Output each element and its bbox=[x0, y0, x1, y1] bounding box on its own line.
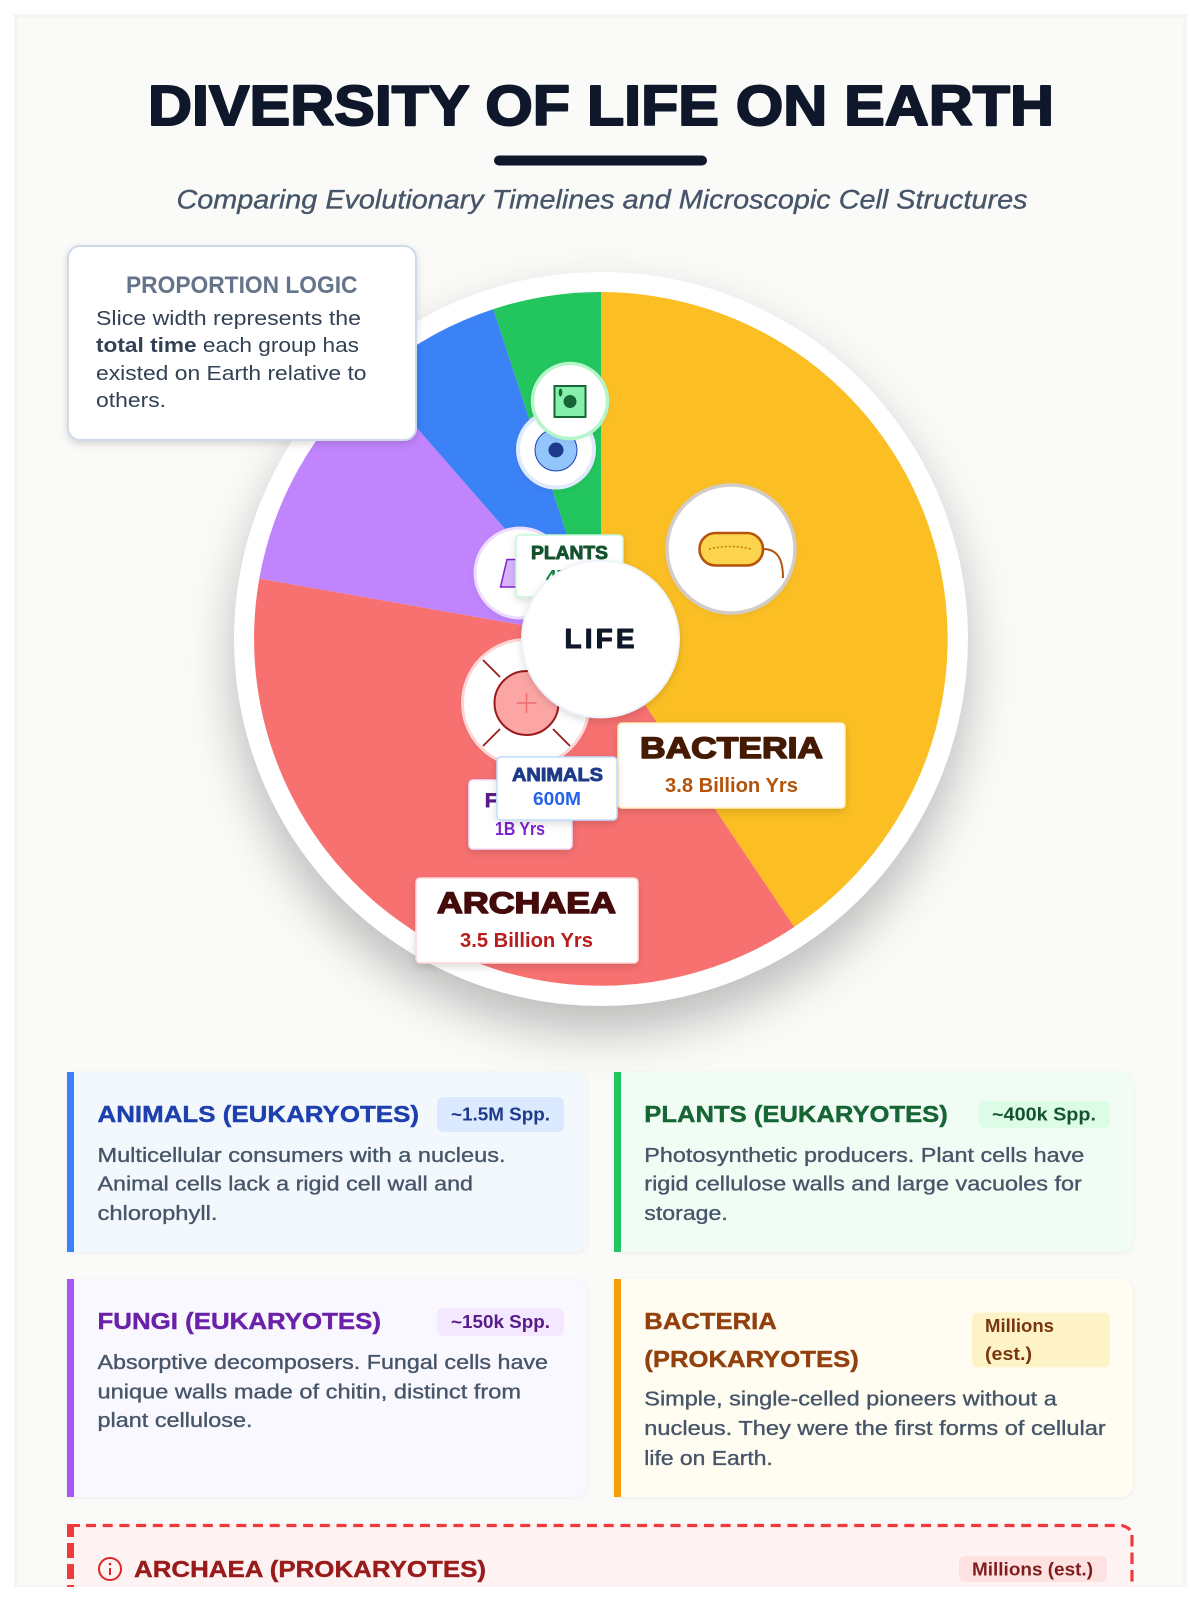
panel: archaea: ARCHAEA (PROKARYOTES) bbox=[134, 1556, 486, 1582]
label: animals: ANIMALS bbox=[512, 764, 603, 785]
title: DIVERSITY OF LIFE ON EARTH bbox=[148, 74, 1054, 138]
icon: plant cell bbox=[532, 364, 608, 438]
pie chart bbox=[234, 272, 968, 1006]
icon: bacteria cell bbox=[667, 485, 795, 613]
panel: bacteria: nucleus. They were the first forms of cellular bbox=[644, 1418, 1106, 1440]
center hub: life: LIFE bbox=[564, 623, 634, 654]
slice: bacteria bbox=[601, 292, 948, 927]
pie shadow bbox=[234, 297, 968, 1031]
panel: fungi: plant cellulose. bbox=[98, 1410, 252, 1432]
panel: archaea bbox=[67, 1524, 1134, 1587]
panel: bacteria bbox=[614, 1279, 1133, 1497]
label: archaea: 3.5 Billion Yrs bbox=[460, 930, 593, 952]
icon: info bbox=[99, 1558, 121, 1580]
panel: plants bbox=[614, 1072, 1133, 1252]
slice: animals bbox=[417, 309, 567, 534]
panel: fungi: ~150k Spp. bbox=[451, 1311, 550, 1332]
label: bacteria: 3.8 Billion Yrs bbox=[665, 775, 798, 797]
label: bacteria: BACTERIA bbox=[640, 732, 823, 765]
panel: animals: ~1.5M Spp. bbox=[451, 1104, 550, 1124]
panel: plants: storage. bbox=[644, 1203, 728, 1225]
slice: fungi bbox=[259, 428, 524, 625]
panel: bacteria: (est.) bbox=[985, 1343, 1032, 1364]
subtitle: Comparing Evolutionary Timelines and Microscopic Cell Structures bbox=[176, 184, 1028, 214]
slice: archaea bbox=[254, 578, 794, 986]
label: animals: 600M bbox=[533, 789, 581, 809]
center hub: life bbox=[522, 560, 679, 718]
panel: bacteria: life on Earth. bbox=[644, 1448, 773, 1470]
title underline bbox=[494, 156, 707, 166]
panel: plants: PLANTS (EUKARYOTES) bbox=[644, 1101, 948, 1127]
label: fungi: 1B Yrs bbox=[495, 819, 545, 839]
icon: fungi cell bbox=[474, 526, 546, 620]
slice: plants bbox=[493, 292, 601, 534]
callout: proportion logic: PROPORTION LOGIC bbox=[126, 272, 358, 299]
panel: bacteria: (PROKARYOTES) bbox=[644, 1346, 859, 1372]
panel: animals: Animal cells lack a rigid cell wall and bbox=[98, 1174, 473, 1196]
panel: bacteria: BACTERIA bbox=[644, 1308, 777, 1334]
panel: animals: chlorophyll. bbox=[98, 1203, 218, 1225]
panel: fungi: FUNGI (EUKARYOTES) bbox=[98, 1308, 381, 1334]
panel: archaea: Millions (est.) bbox=[972, 1558, 1093, 1580]
label: plants: 470M bbox=[546, 567, 594, 587]
callout: proportion logic: Slice width represents the bbox=[96, 307, 361, 330]
panel: plants: ~400k Spp. bbox=[992, 1104, 1096, 1124]
icon: archaea cell bbox=[462, 640, 590, 766]
panel: plants: Photosynthetic producers. Plant cells have bbox=[644, 1145, 1084, 1167]
label: plants: PLANTS bbox=[531, 542, 608, 563]
panel: bacteria: Millions bbox=[985, 1315, 1054, 1336]
panel: animals bbox=[67, 1072, 587, 1252]
callout: proportion logic: existed on Earth relative to bbox=[96, 362, 366, 385]
label: animals bbox=[497, 757, 617, 820]
icon: animal cell bbox=[518, 412, 594, 488]
panel: bacteria: Simple, single-celled pioneers without a bbox=[644, 1388, 1058, 1410]
label: fungi: FUNGI bbox=[485, 791, 544, 812]
panel: plants: rigid cellulose walls and large vacuoles for bbox=[644, 1174, 1082, 1196]
panel: animals: ANIMALS (EUKARYOTES) bbox=[98, 1101, 419, 1127]
label: archaea bbox=[416, 878, 638, 963]
panel: fungi: unique walls made of chitin, distinct from bbox=[98, 1382, 521, 1404]
panel: fungi bbox=[67, 1279, 587, 1497]
panel: animals: Multicellular consumers with a nucleus. bbox=[98, 1145, 506, 1167]
label: plants bbox=[516, 535, 623, 597]
panel: fungi: Absorptive decomposers. Fungal cells have bbox=[98, 1352, 548, 1374]
callout: proportion logic bbox=[68, 246, 416, 440]
label: fungi bbox=[469, 780, 572, 849]
pie ring bbox=[234, 272, 968, 1006]
callout: proportion logic: total time each group has bbox=[96, 334, 359, 357]
callout: proportion logic: others. bbox=[96, 389, 166, 412]
label: bacteria bbox=[618, 723, 845, 808]
label: archaea: ARCHAEA bbox=[437, 887, 616, 920]
